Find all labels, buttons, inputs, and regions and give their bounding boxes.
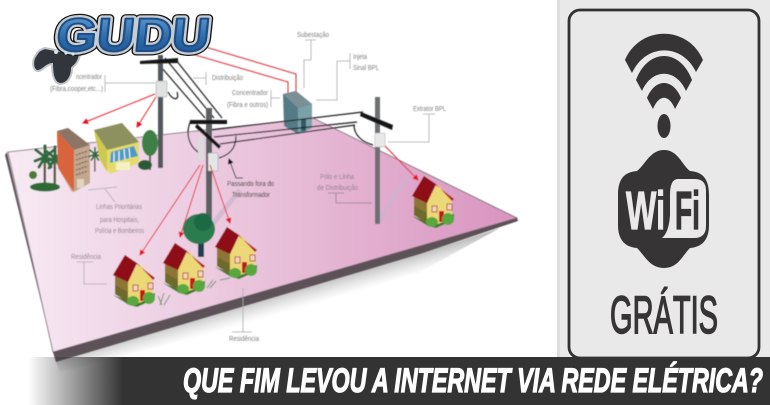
label: pólo e linha [317,174,358,192]
logo wordmark: GUDU [54,8,213,61]
leader: pole and line [328,193,372,203]
house 2 [163,243,205,295]
label: injeta sinal [353,54,379,72]
logo: GUDU [33,8,213,84]
tree group left [29,146,65,192]
orange building [57,128,90,192]
house 3 [215,227,257,279]
label: concentrador: ncentrador [76,74,103,81]
label: passando fora [227,181,274,199]
label: linhas prioritárias [95,204,144,235]
label: residência bottom: Residência [229,336,259,343]
label: concentrador fibra: (Fibra e outros) [227,102,268,109]
pole 3 [360,97,393,224]
label: pólo e linha: de Distribuição [317,185,358,192]
pink platform [5,118,518,362]
label: injeta sinal: Injeta [353,54,367,61]
sign border [569,10,759,358]
icon: wi-fi waves [625,34,703,138]
label: residência left: Residência [71,254,101,261]
label: pólo e linha: Pólo e Linha [320,174,354,181]
label: linhas prioritárias: para Hospitais, [100,217,139,224]
label: distribuição: Distribuição [212,75,243,82]
house 1 [113,255,155,307]
label: linhas prioritárias: Linhas Prioritárias [96,204,142,211]
pole 1 [140,55,178,168]
red arrows [83,94,418,255]
label: passando fora: Transformador [232,192,271,199]
label leader lines [77,40,435,332]
gamepad buttons [54,50,75,56]
label: extrator: Extrator BPL [413,106,446,113]
label: concentrador fibra [227,90,269,109]
distribution wires [155,58,373,158]
label: concentrador: (Fibra,cooper,etc...) [50,86,103,93]
label: subestação: Subestação [297,32,329,39]
pole shadows [212,176,408,225]
label: linhas prioritárias: Polícia e Bombeiros [95,228,144,235]
logo wordmark: GUDU [54,8,213,61]
pole 2 [190,108,227,228]
substation [283,91,312,134]
big tree [183,213,215,257]
label: concentrador fibra: Concentrador [232,90,269,97]
label: passando fora: Passando fora do [227,181,274,188]
black arrow to transformer bypass [229,159,243,178]
grass tufts [158,278,230,305]
label: concentrador [50,74,103,93]
red signal lines to substation [182,40,296,93]
logo wordmark: GUDU [54,8,213,61]
house 4 [412,176,454,228]
panel: wi-fi grátis [557,0,770,405]
title banner [28,357,770,405]
yellow shop [89,123,139,174]
platform shadow [56,228,500,372]
tree right of shop [138,130,158,170]
icon: wi-fi logo: Wi [626,181,665,241]
label: injeta sinal: Sinal BPL [353,65,379,72]
icon: wi-fi logo: Fi [675,181,700,241]
icon: wi-fi logo [618,150,709,268]
diagram: broadband over power lines [5,32,518,372]
gamepad [33,48,80,84]
